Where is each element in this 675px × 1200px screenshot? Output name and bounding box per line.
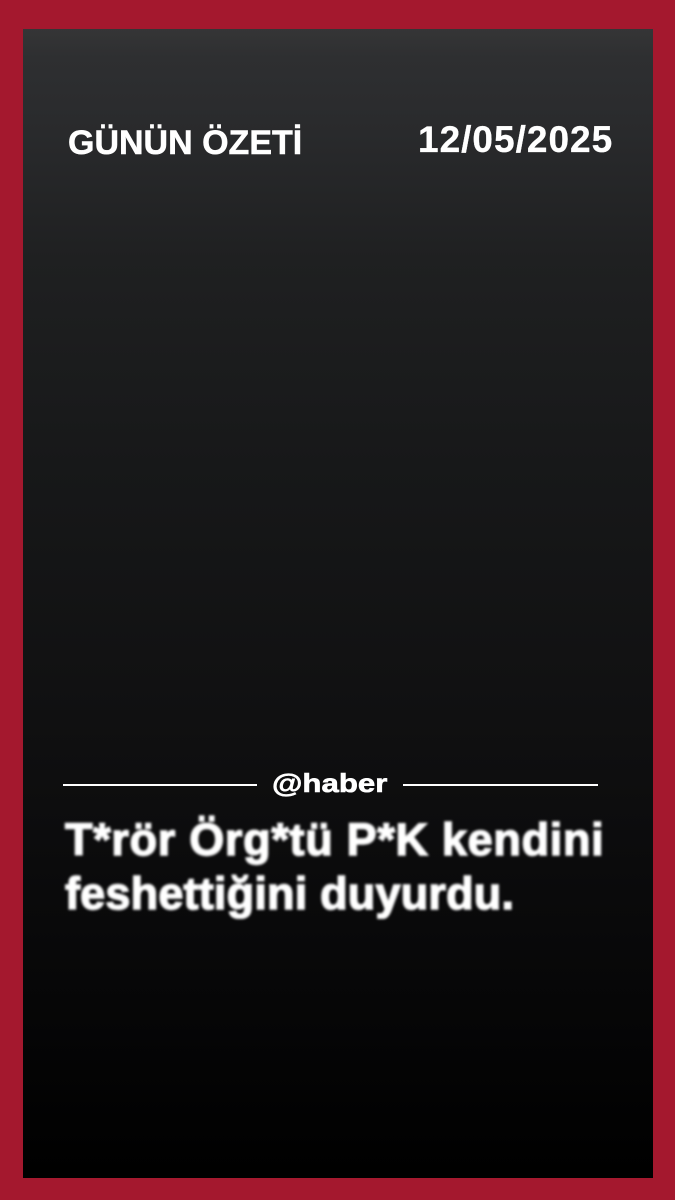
heading: daily summary: GÜNÜN ÖZETİ (68, 124, 302, 162)
date: 12/05/2025 (418, 119, 613, 160)
headline (blurred): T*rör Örg*tü P*K kendini (65, 814, 604, 865)
handle: @haber (272, 768, 387, 798)
headline (blurred) (62, 813, 604, 921)
headline (blurred): feshettiğini duyurdu. (65, 868, 514, 919)
